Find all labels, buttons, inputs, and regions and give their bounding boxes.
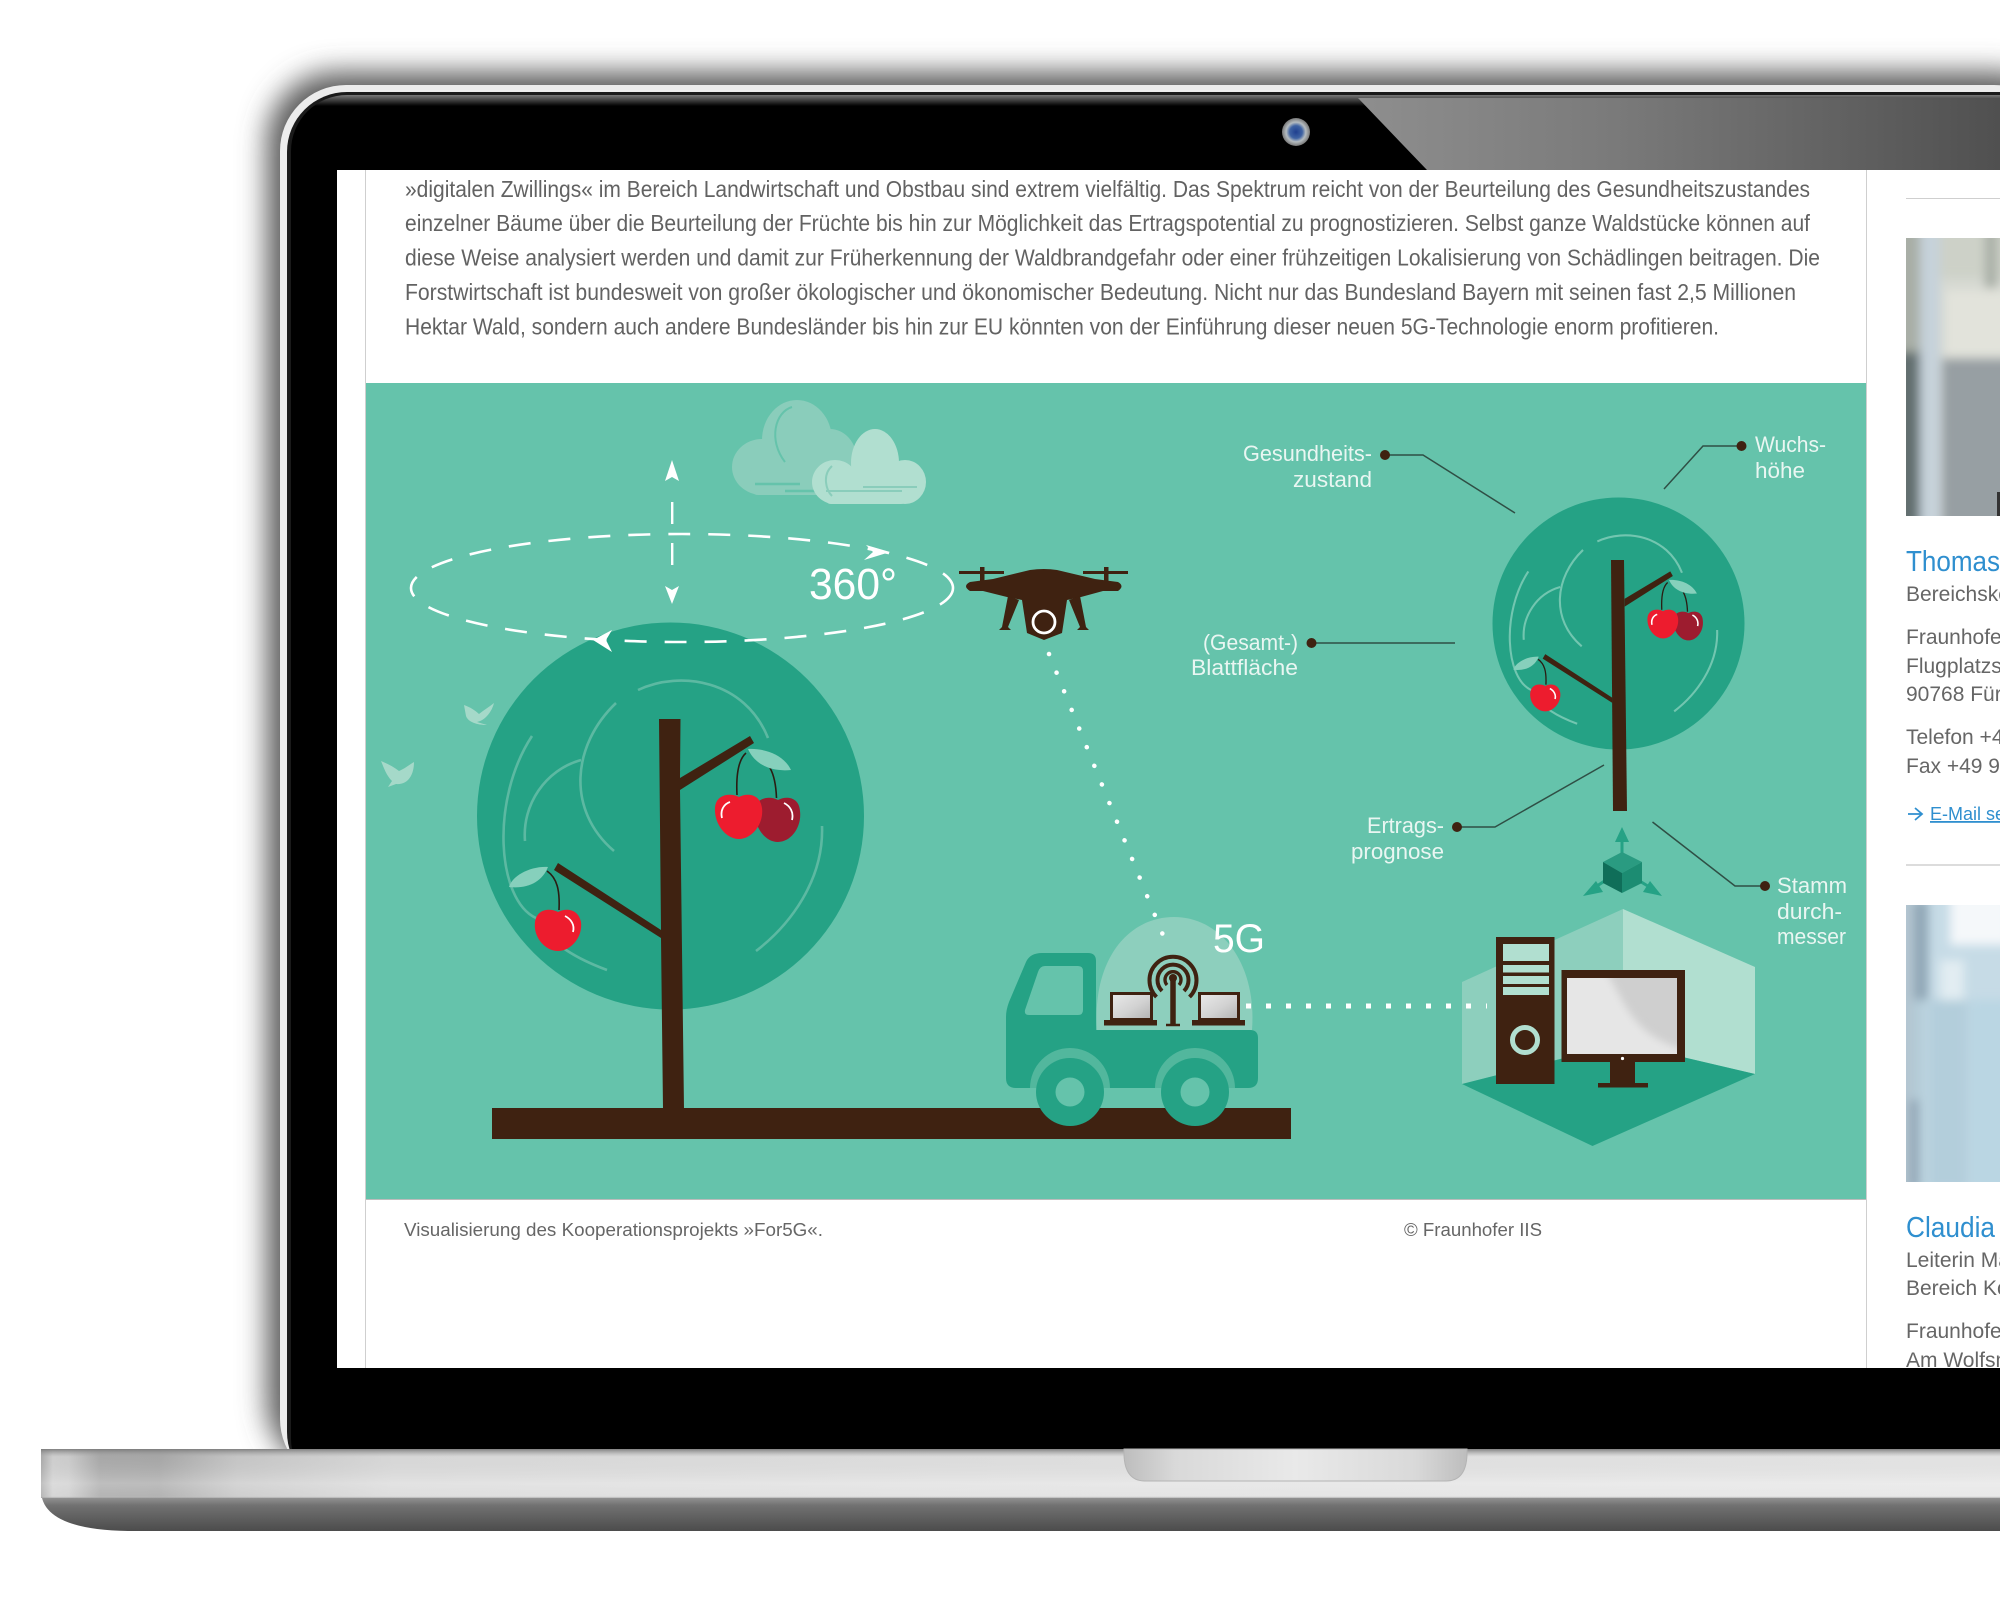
article text: Hektar Wald, sondern auch andere Bundesländer bis hin zur EU könnten von der Einführung dieser neuen 5G-Technologie enorm profitieren. [405, 314, 1719, 340]
truck body [1006, 953, 1258, 1088]
callout: Gesamtblattflaeche: (Gesamt-) [1203, 630, 1298, 655]
monitor [1560, 970, 1685, 1088]
callout lines and dots [1306, 441, 1770, 891]
label: 360 degrees: 360° [809, 560, 897, 609]
laptop base [41, 1449, 2000, 1531]
article text: Forstwirtschaft ist bundesweit von großer ökologischer und ökonomischer Bedeutung. Nicht nur das Bundesland Bayern mit seinen fast 2,5 Millionen [405, 279, 1796, 305]
photo: contact Claudia [1896, 895, 2000, 1195]
contact: Claudia [1906, 1212, 2000, 1372]
icon: birds [381, 703, 494, 787]
big tree crown [477, 622, 864, 1010]
icon: vertical movement arrows [665, 460, 679, 604]
computer room [1462, 909, 1755, 1146]
callout: Stammdurchmesser: durch- [1777, 899, 1842, 924]
icon: drone [959, 567, 1128, 640]
laptops [1104, 992, 1245, 1026]
callout: Ertragsprognose: prognose [1351, 839, 1444, 864]
photo: contact Thomas [1896, 228, 2000, 532]
callout: Stammdurchmesser [1777, 873, 1847, 949]
dotted signal drone to truck [1049, 654, 1167, 945]
image credit: © Fraunhofer IIS [1404, 1220, 1542, 1240]
callout: Stammdurchmesser: Stamm [1777, 873, 1847, 898]
sidebar divider top [1906, 198, 2000, 199]
callout: Gesamtblattflaeche: Blattfläche [1191, 655, 1298, 680]
cab window [1025, 966, 1083, 1015]
callout: Gesundheitszustand [1243, 441, 1372, 492]
cherry left [509, 867, 581, 951]
callout: Ertragsprognose: Ertrags- [1367, 813, 1444, 838]
dotted link truck to computer [1246, 1004, 1487, 1008]
infographic panel [366, 383, 1866, 1200]
callout: Wuchshoehe [1755, 432, 1826, 483]
webcam [1282, 118, 1310, 146]
computer tower [1496, 937, 1554, 1084]
article text: diese Weise analysiert werden und damit zur Früherkennung der Waldbrandgefahr oder einer frühzeitigen Lokalisierung von Schädlingen beitragen. Die [405, 244, 1820, 270]
web page screen [337, 170, 2000, 1372]
callout: Ertragsprognose [1351, 813, 1444, 864]
ground [492, 1108, 1291, 1139]
callout: Gesundheitszustand: Gesundheits- [1243, 441, 1372, 466]
360 degree dashed orbit [411, 534, 953, 652]
callout: Stammdurchmesser: messer [1777, 924, 1846, 949]
small tree [1492, 498, 1744, 811]
callout: Gesamtblattflaeche [1191, 630, 1298, 680]
wheels [1030, 1048, 1235, 1126]
callout: Wuchshoehe: höhe [1755, 458, 1805, 483]
tree crown lines [503, 681, 822, 970]
computer [1496, 937, 1685, 1088]
icon: clouds [732, 400, 926, 504]
laptop lid and bezel [280, 85, 2000, 1495]
5G dome [1097, 917, 1252, 1030]
sidebar divider middle [1906, 864, 2000, 866]
laptop notch [1124, 1449, 1467, 1481]
tree trunk and branches [554, 719, 754, 1109]
cherries right [715, 749, 800, 842]
article text [405, 176, 1820, 340]
big tree [503, 681, 822, 1109]
label: 5G: 5G [1213, 917, 1265, 961]
callout: Gesundheitszustand: zustand [1293, 467, 1372, 492]
laptop lid shadow [267, 72, 2000, 1472]
bezel glare [1358, 98, 2000, 170]
antenna [1150, 957, 1196, 1025]
icon: 3D cube with axes [1583, 827, 1662, 896]
contact: Thomas [1906, 546, 2000, 824]
article text: einzelner Bäume über die Beurteilung der Früchte bis hin zur Möglichkeit das Ertragspotential zu prognostizieren. Selbst ganze Waldstücke können auf [405, 210, 1811, 236]
truck with 5G equipment [1006, 917, 1258, 1126]
callout: Wuchshoehe: Wuchs- [1755, 432, 1826, 457]
article text: »digitalen Zwillings« im Bereich Landwirtschaft und Obstbau sind extrem vielfältig. Das Spektrum reicht von der Beurteilung des Gesundheitszustandes [405, 176, 1810, 202]
figure caption: Visualisierung des Kooperationsprojekts »For5G«. [404, 1220, 823, 1240]
